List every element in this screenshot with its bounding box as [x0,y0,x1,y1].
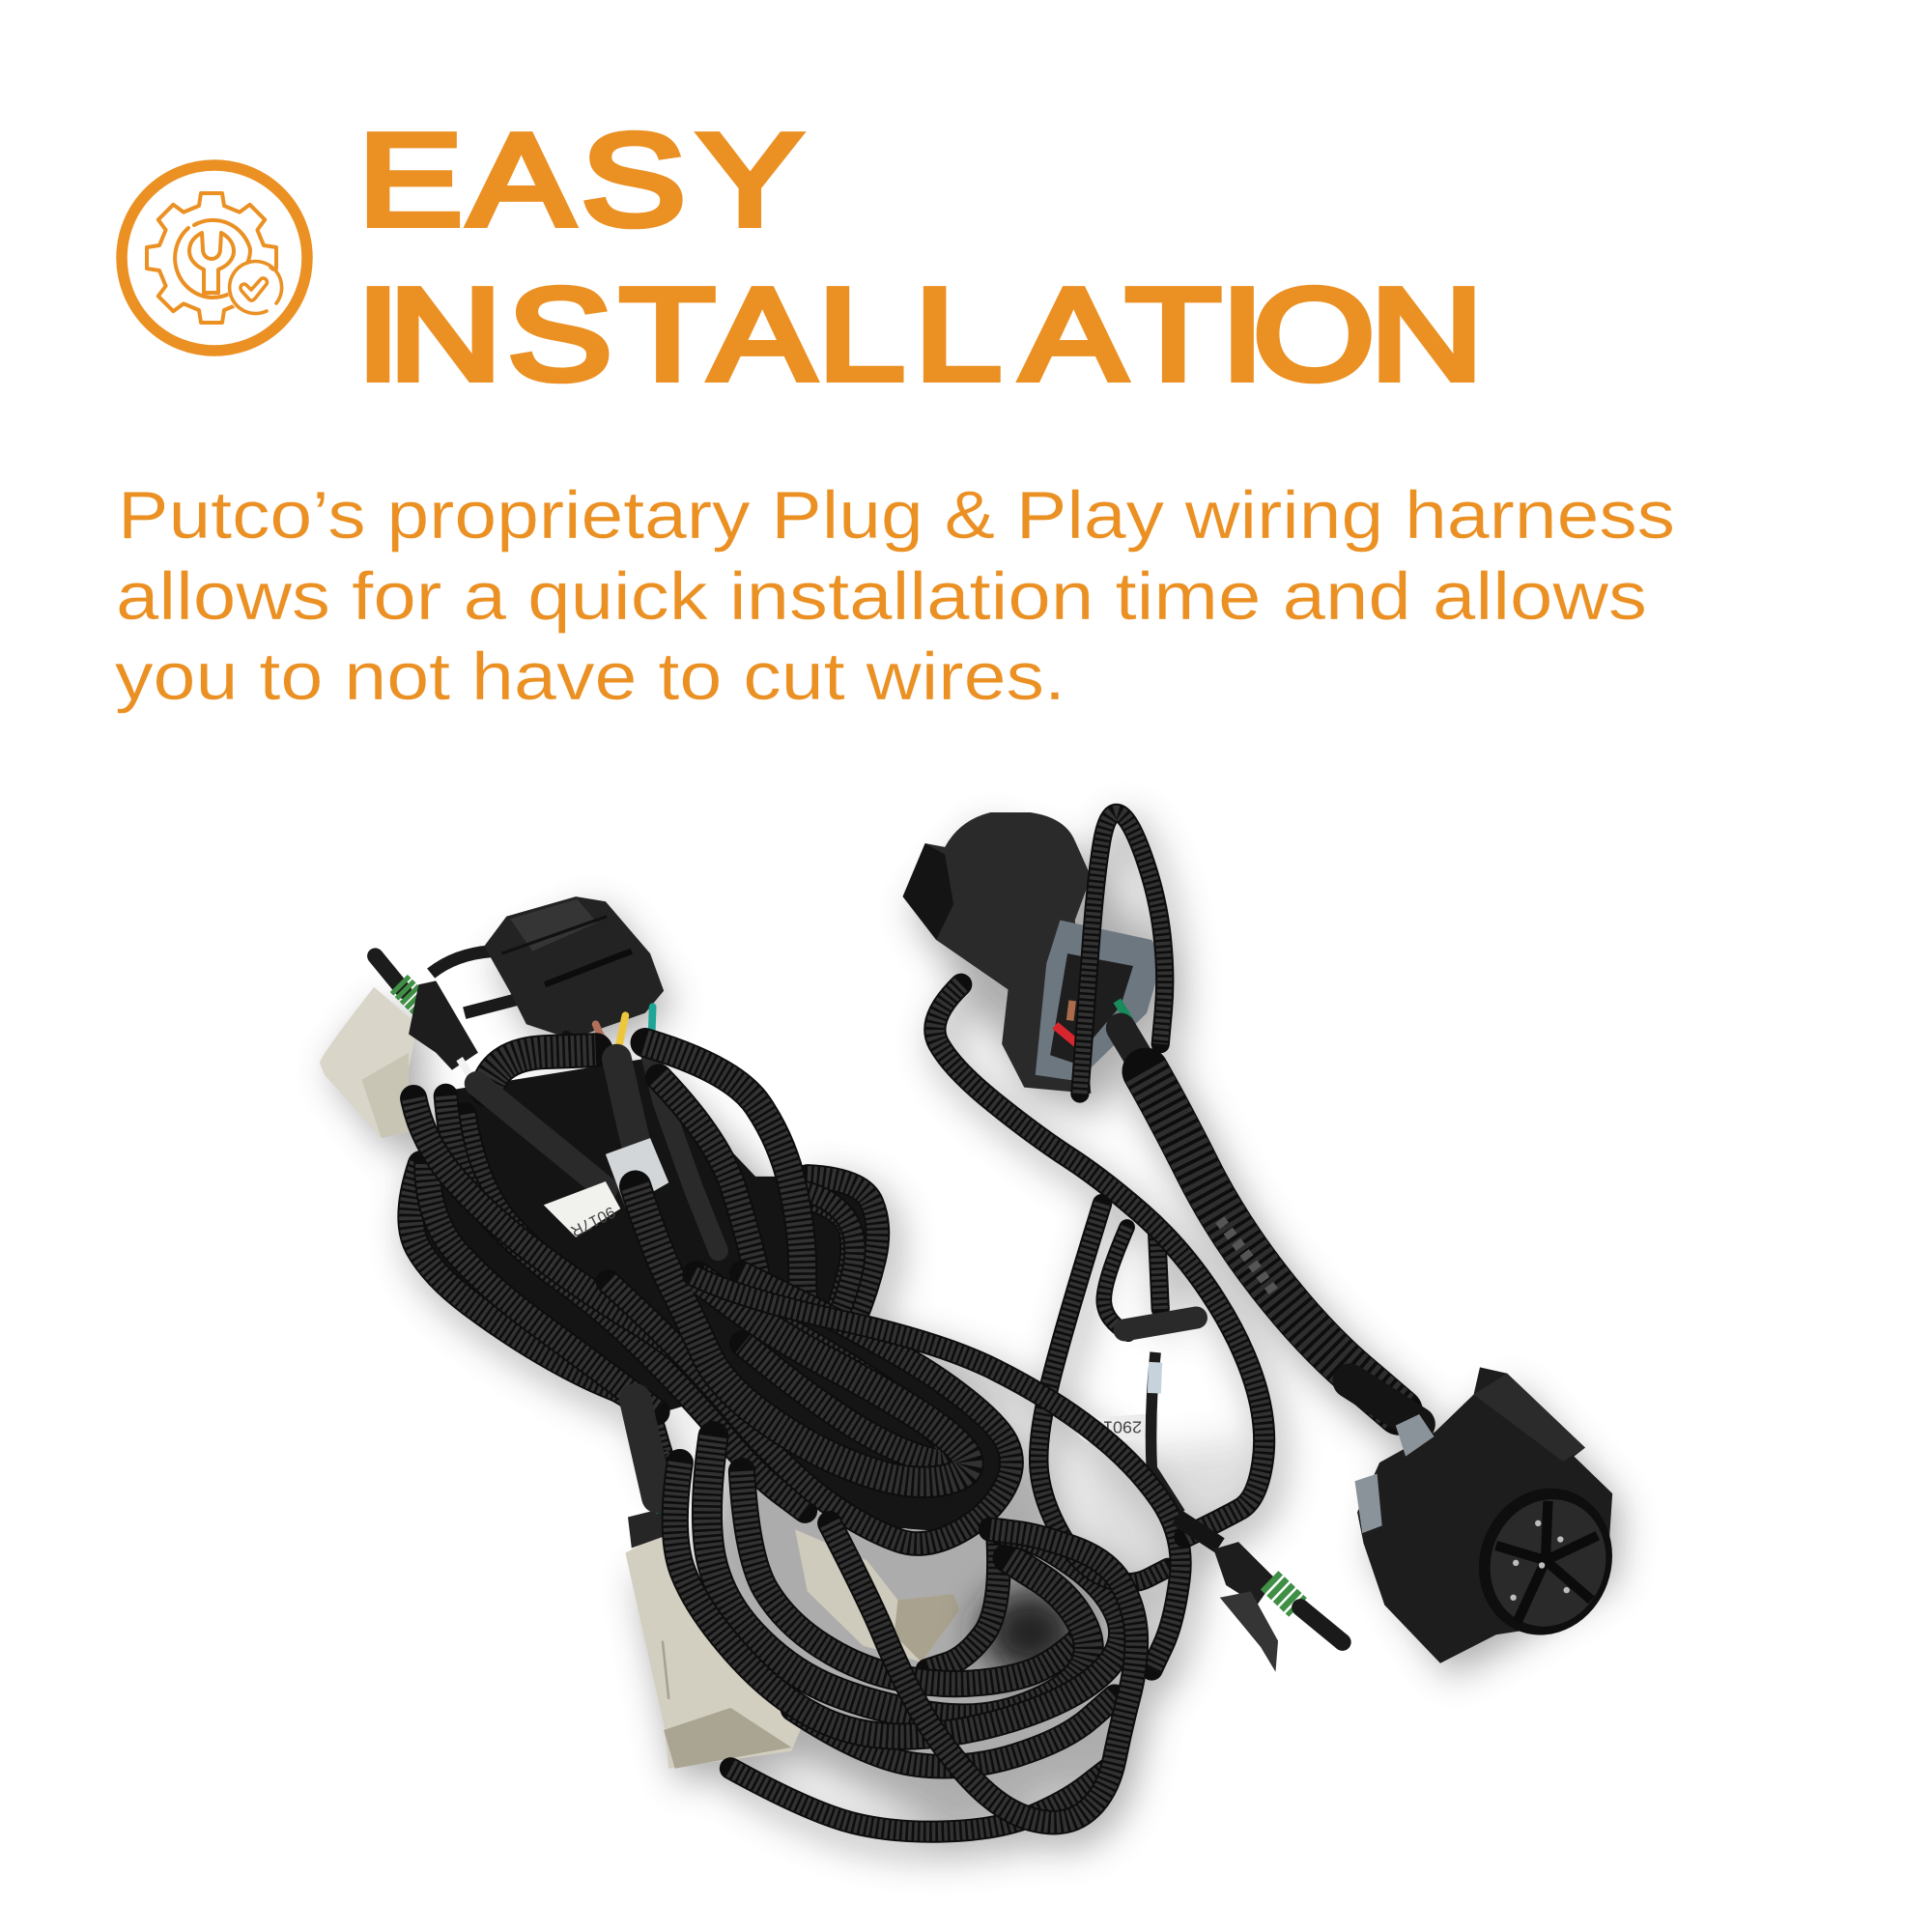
title line: EASY: EASY [358,106,802,252]
body text [115,477,1675,714]
icon: gear with wrench and check mark [122,165,307,351]
wiring bundle core, upper left [414,1059,886,1418]
body text: you to not have to cut wires. [115,639,1065,714]
body text: Putco’s proprietary Plug & Play wiring harness [118,477,1675,553]
taped sleeves near connector [477,1053,719,1251]
label: 2901 tag [1074,1413,1158,1443]
corrugated tubes: lower loops [675,1436,1122,1832]
connector: beige lower plug [625,1492,960,1769]
corrugated tube: upper left curl [487,1050,596,1090]
label: 2901 tag: 2901 [1103,1418,1142,1437]
taped neck above beige plug [636,1400,658,1497]
corrugated tube: top loop [1080,812,1165,1094]
connector: small sealed plug, upper left [375,952,526,1094]
corrugated tubes: upper left bundle [411,1042,877,1511]
label: 9017R tag: 9017R [568,1203,618,1240]
right harness thin branches [1038,1204,1196,1582]
wires: brown, yellow, teal, black [566,1007,653,1054]
connector: small sealed plug, lower [1177,1517,1343,1672]
dark core, lower bundle [980,1588,1080,1677]
identification band [606,1138,668,1208]
connector: black four-wire plug [484,896,664,1039]
title line: INSTALLATION: INSTALLATION [356,261,1483,407]
knot core behind the big loop [668,1275,1015,1533]
connector: large black socket housing [903,812,1091,1094]
corrugated tube: loop from socket [935,984,1264,1537]
connector: beige upper-left plug [320,987,417,1138]
body text: allows for a quick installation time and allows [116,558,1647,634]
corrugated tubes: main knot over lower loops [608,1186,1180,1823]
connector: gray locking clip with wires [1036,921,1163,1081]
product photo: wiring harness [320,812,1633,1845]
label: 9017R tag [544,1181,620,1240]
soft drop shadow [328,826,1621,1845]
main trunk tube with tape [1121,1028,1418,1424]
connector: seven-pin round socket [1355,1367,1633,1663]
